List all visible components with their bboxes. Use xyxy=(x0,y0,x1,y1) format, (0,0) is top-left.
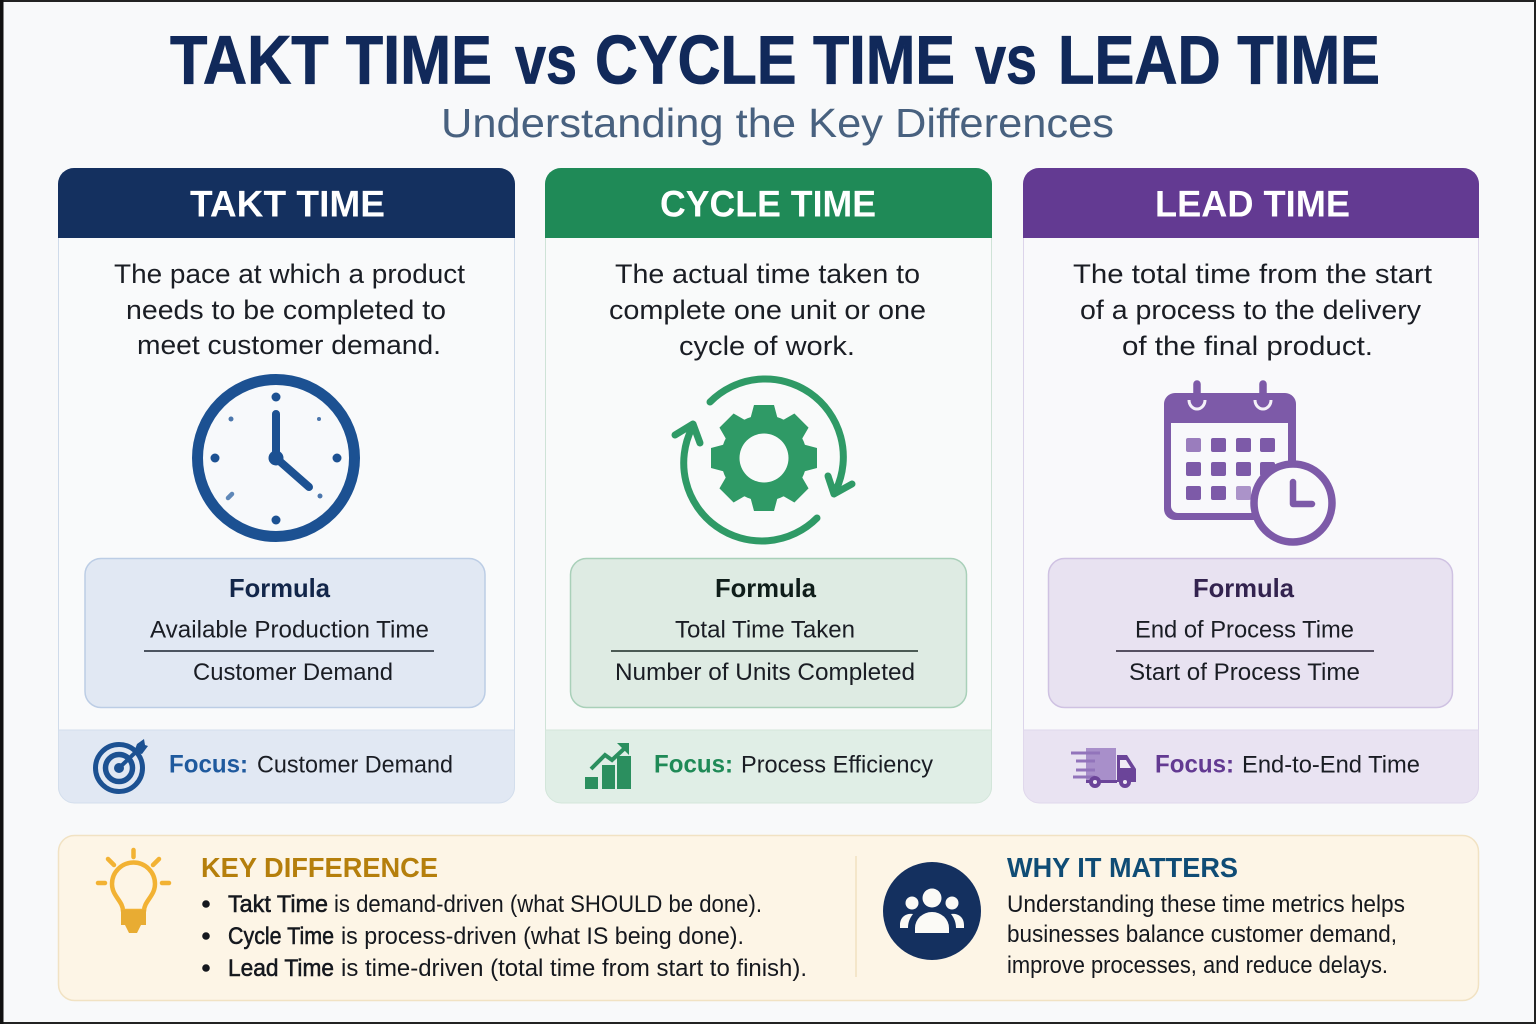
cycle description: The actual time taken to xyxy=(615,259,920,289)
takt formula box: Customer Demand xyxy=(193,659,393,686)
takt focus text: Focus: xyxy=(169,750,248,778)
key difference xyxy=(201,852,807,982)
cycle formula box: Total Time Taken xyxy=(675,616,855,644)
icon: calendar with clock xyxy=(1164,384,1332,542)
takt focus text xyxy=(169,750,453,778)
icon: people xyxy=(883,862,981,960)
lead formula box: Formula xyxy=(1193,573,1295,603)
lead header: LEAD TIME xyxy=(1155,184,1350,224)
icon: growth chart xyxy=(585,743,631,789)
title xyxy=(170,22,1380,98)
why it matters xyxy=(1007,852,1405,979)
cycle description: cycle of work. xyxy=(679,331,855,361)
lead description xyxy=(1073,259,1433,361)
icon: clock xyxy=(198,380,354,536)
cycle description xyxy=(609,259,926,361)
title: CYCLE TIME xyxy=(595,22,955,98)
icon: light bulb xyxy=(98,850,169,933)
lead focus text: Focus: xyxy=(1155,750,1234,778)
icon: target xyxy=(96,739,148,792)
icon: delivery truck xyxy=(1071,748,1136,786)
key difference: is demand-driven (what SHOULD be done). xyxy=(334,891,762,918)
key difference: KEY DIFFERENCE xyxy=(201,852,438,883)
panel: cycle time xyxy=(545,168,992,803)
why it matters: Understanding these time metrics helps xyxy=(1007,891,1405,918)
why it matters: WHY IT MATTERS xyxy=(1007,852,1238,883)
cycle focus text: Focus: xyxy=(654,750,733,778)
takt header xyxy=(58,168,515,238)
cycle formula box xyxy=(570,558,966,708)
lead description: of the final product. xyxy=(1122,331,1373,361)
takt focus text: Customer Demand xyxy=(257,752,453,778)
key difference: is time-driven (total time from start to finish). xyxy=(341,955,807,982)
cycle description: complete one unit or one xyxy=(609,295,926,325)
lead description: of a process to the delivery xyxy=(1080,295,1422,325)
takt description: needs to be completed to xyxy=(126,295,446,325)
title: TAKT TIME xyxy=(170,22,492,98)
why it matters: businesses balance customer demand, xyxy=(1007,921,1397,948)
lead formula box: End of Process Time xyxy=(1135,616,1354,644)
cycle formula box: Formula xyxy=(715,573,817,603)
subtitle: Understanding the Key Differences xyxy=(441,100,1114,146)
lead focus text xyxy=(1155,750,1420,778)
title: vs xyxy=(515,22,577,98)
panel: takt time xyxy=(58,168,515,803)
key difference: Takt Time xyxy=(228,891,328,918)
lead description: The total time from the start xyxy=(1073,259,1433,289)
lead formula box: Start of Process Time xyxy=(1129,659,1360,686)
takt formula box xyxy=(85,558,485,708)
title: vs xyxy=(975,22,1037,98)
takt formula box: Available Production Time xyxy=(150,616,429,644)
lead header xyxy=(1023,168,1479,238)
cycle header: CYCLE TIME xyxy=(660,184,876,224)
lead focus band xyxy=(1024,730,1478,803)
cycle focus text: Process Efficiency xyxy=(741,752,933,778)
panel: bottom summary xyxy=(58,836,1478,1000)
key difference: is process-driven (what IS being done). xyxy=(341,923,744,950)
cycle focus band xyxy=(546,730,992,803)
takt description: The pace at which a product xyxy=(114,259,466,289)
takt formula box: Formula xyxy=(229,573,331,603)
key difference: Lead Time xyxy=(228,955,334,982)
takt header: TAKT TIME xyxy=(190,184,385,224)
lead focus text: End-to-End Time xyxy=(1242,752,1420,778)
icon: gear with cycle arrows xyxy=(675,379,852,541)
cycle formula box: Number of Units Completed xyxy=(615,659,915,686)
title: LEAD TIME xyxy=(1058,22,1380,98)
takt description: meet customer demand. xyxy=(137,330,441,360)
takt description xyxy=(114,259,466,360)
cycle focus text xyxy=(654,750,933,778)
why it matters: improve processes, and reduce delays. xyxy=(1007,952,1388,979)
lead formula box xyxy=(1048,558,1452,708)
takt focus band xyxy=(58,730,514,803)
cycle header xyxy=(545,168,992,238)
key difference: Cycle Time xyxy=(228,923,334,950)
panel: lead time xyxy=(1023,168,1479,803)
